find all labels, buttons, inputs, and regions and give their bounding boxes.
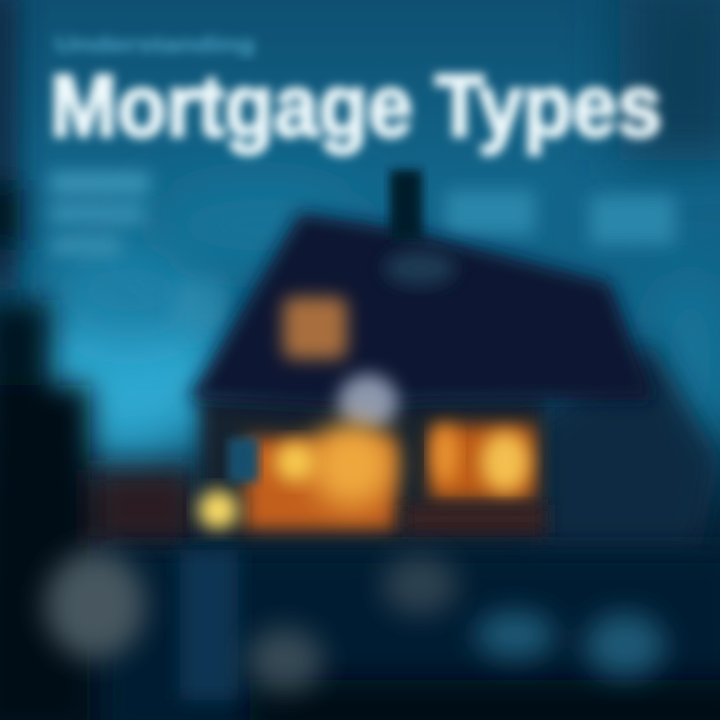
house: right window glow	[430, 425, 535, 500]
foreground: blurred labels	[475, 611, 665, 677]
house: walls	[200, 395, 545, 545]
left dark tree silhouette	[0, 0, 195, 720]
house: porch glow	[338, 374, 398, 430]
left column blurred text	[50, 172, 225, 330]
house: right wing	[530, 340, 720, 550]
foreground: bushes	[45, 551, 458, 692]
house: base shadow	[405, 505, 545, 533]
house: attic window	[283, 297, 347, 359]
house	[188, 170, 720, 550]
house: roof	[188, 212, 655, 408]
foreground: figure	[180, 550, 238, 700]
small text above the title: Understanding	[55, 32, 255, 57]
house: roof highlight	[384, 250, 456, 286]
right column blurred text	[445, 190, 675, 245]
title: Mortgage Types	[50, 56, 662, 155]
foreground: dark ground	[100, 550, 720, 720]
house: left window glow	[245, 438, 395, 530]
house: chimney	[390, 170, 422, 240]
foreground	[45, 550, 720, 720]
house: lamp	[198, 490, 238, 530]
house: door	[228, 438, 258, 482]
